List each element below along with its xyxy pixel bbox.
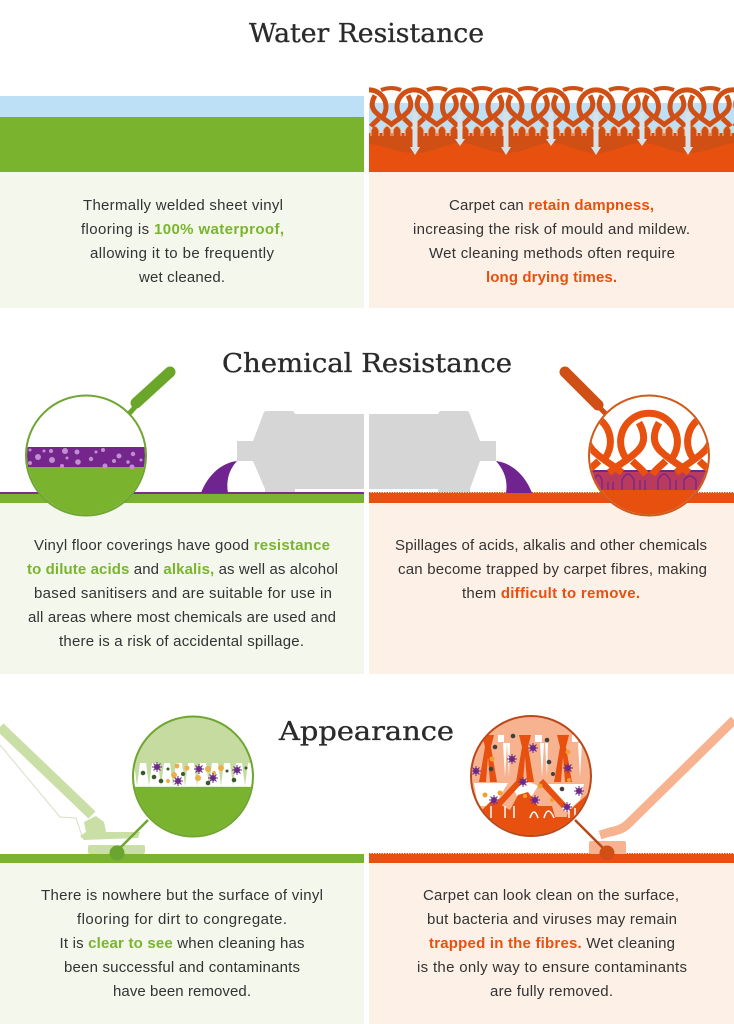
vinyl water text block [0,172,364,308]
chemical spill: purple pour [496,461,532,493]
vinyl water text block: flooring is 100% waterproof, [81,221,284,238]
vinyl appearance text block [0,863,364,1024]
carpet appearance text block: is the only way to ensure contaminants [417,959,687,976]
carpet appearance text block: are fully removed. [490,983,613,1000]
icon: vacuum cleaner [0,727,145,854]
floor strip: carpet [369,854,734,863]
arrows: water drips [410,112,693,155]
vinyl appearance text block: It is clear to see when cleaning has [60,935,304,952]
carpet chemical text block: Spillages of acids, alkalis and other chemicals [395,537,707,554]
icon: magnifier over vinyl surface [110,716,260,860]
carpet water text block: Carpet can retain dampness, [449,197,654,214]
panel: carpet appearance [369,716,734,1024]
carpet fibres with water seeping through [345,88,734,172]
vinyl appearance text block: been successful and contaminants [64,959,300,976]
carpet appearance text block: trapped in the fibres. Wet cleaning [429,935,675,952]
vinyl water text block: Thermally welded sheet vinyl [83,197,283,214]
chemical spill: purple pour [201,461,237,493]
vinyl chemical text block: to dilute acids and alkalis, as well as alcohol [27,561,338,578]
vinyl appearance text block: flooring for dirt to congregate. [77,911,287,928]
carpet water text block [369,172,734,308]
carpet water text block: long drying times. [486,269,617,286]
carpet water text block: Wet cleaning methods often require [429,245,675,262]
vinyl appearance text block: have been removed. [113,983,251,1000]
floor strip: carpet [369,492,734,503]
carpet chemical text block: them difficult to remove. [462,585,640,602]
panel: vinyl chemical resistance [0,372,364,674]
vinyl chemical text block: all areas where most chemicals are used and [28,609,336,626]
carpet water text block: increasing the risk of mould and mildew. [413,221,690,238]
title: Chemical Resistance: Chemical Resistance [222,349,512,379]
carpet appearance text block: Carpet can look clean on the surface, [423,887,679,904]
panel: vinyl water resistance [0,96,364,308]
vinyl water illustration [0,96,364,172]
title: Water Resistance: Water Resistance [249,19,484,49]
icon: magnifier over vinyl [20,372,170,522]
chemical bottle [237,411,364,492]
vinyl chemical text block: based sanitisers and are suitable for use in [34,585,332,602]
panel: carpet chemical resistance [369,372,734,674]
vinyl appearance text block: There is nowhere but the surface of vinyl [41,887,323,904]
carpet chemical text block: can become trapped by carpet fibres, making [398,561,707,578]
vinyl chemical text block: Vinyl floor coverings have good resistance [34,537,330,554]
floor strip: vinyl [0,492,364,503]
vinyl water text block: wet cleaned. [138,269,225,286]
floor strip: vinyl [0,854,364,863]
chemical bottle [369,411,496,492]
panel: vinyl appearance [0,716,364,1024]
carpet appearance text block [369,863,734,1024]
icon: vacuum cleaner [589,720,734,854]
vinyl chemical text block: there is a risk of accidental spillage. [59,633,304,650]
carpet chemical text block [369,503,734,674]
vinyl water text block: allowing it to be frequently [90,245,274,262]
icon: magnifier over carpet [560,366,710,516]
panel: carpet water resistance [345,88,734,308]
title: Appearance: Appearance [278,717,454,747]
icon: magnifier over carpet fibres [470,716,614,860]
carpet appearance text block: but bacteria and viruses may remain [427,911,677,928]
vinyl chemical text block [0,503,364,674]
